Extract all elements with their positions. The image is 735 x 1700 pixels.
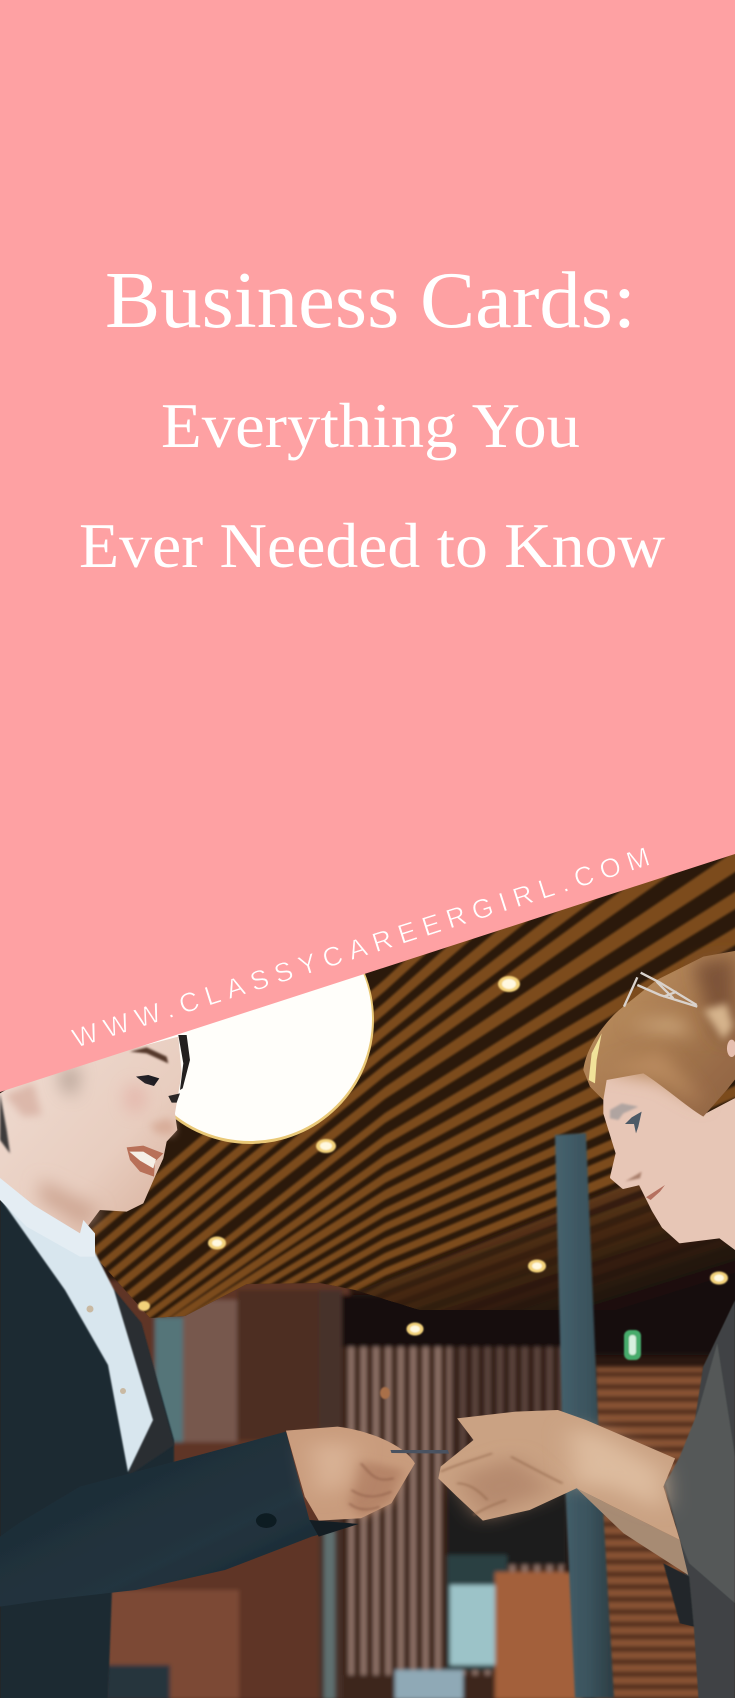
left woman: mouth [127, 1146, 163, 1177]
exit sign [624, 1330, 641, 1360]
title: Business Cards: Business Cards: [105, 257, 636, 345]
right woman: eye, brow, nose and lips [610, 1103, 638, 1120]
subtitle: Everything You: Everything You [161, 391, 580, 461]
right hand and forearm [438, 1410, 680, 1540]
left woman: jacket body [0, 1195, 174, 1700]
left woman: ear and hair [5, 1083, 42, 1117]
business card [391, 1450, 449, 1454]
left woman: eyebrow, eyes and cheek [130, 1047, 168, 1063]
left woman: collar [0, 1177, 95, 1257]
left woman: jacket and shirt [0, 1178, 359, 1700]
photo background base [0, 1090, 735, 1698]
left woman: face and neck shape [0, 1037, 182, 1233]
left woman: shirt [0, 1178, 153, 1472]
forearm trim of right woman [577, 1488, 688, 1575]
website url on diagonal: WWW.CLASSYCAREERGIRL.COM [69, 842, 653, 1054]
right woman: jacket and sleeve [663, 1300, 735, 1700]
right woman: hair [583, 950, 735, 1117]
hands exchanging card [286, 1410, 688, 1575]
ceiling: wooden slats [91, 854, 735, 1318]
ceiling lights [138, 976, 728, 1399]
pillar: blue-grey post [555, 1133, 614, 1698]
round pendant lamp [139, 974, 374, 1144]
interior walls and slatted panels [100, 1280, 735, 1700]
left woman: sleeve [0, 1432, 359, 1607]
pink diagonal panel [0, 0, 735, 1092]
left hand [286, 1427, 415, 1521]
right woman: glasses on head [624, 973, 697, 1007]
subtitle: Ever Needed to Know: Ever Needed to Know [79, 511, 666, 581]
left woman: face and neck [0, 1035, 190, 1257]
left woman: cuff button [256, 1513, 277, 1528]
right woman: head, hair and glasses [583, 950, 735, 1252]
photo: two women exchanging a business card [0, 854, 735, 1698]
right woman: face [605, 1072, 735, 1252]
sleeve shadow under left hand [309, 1520, 359, 1537]
